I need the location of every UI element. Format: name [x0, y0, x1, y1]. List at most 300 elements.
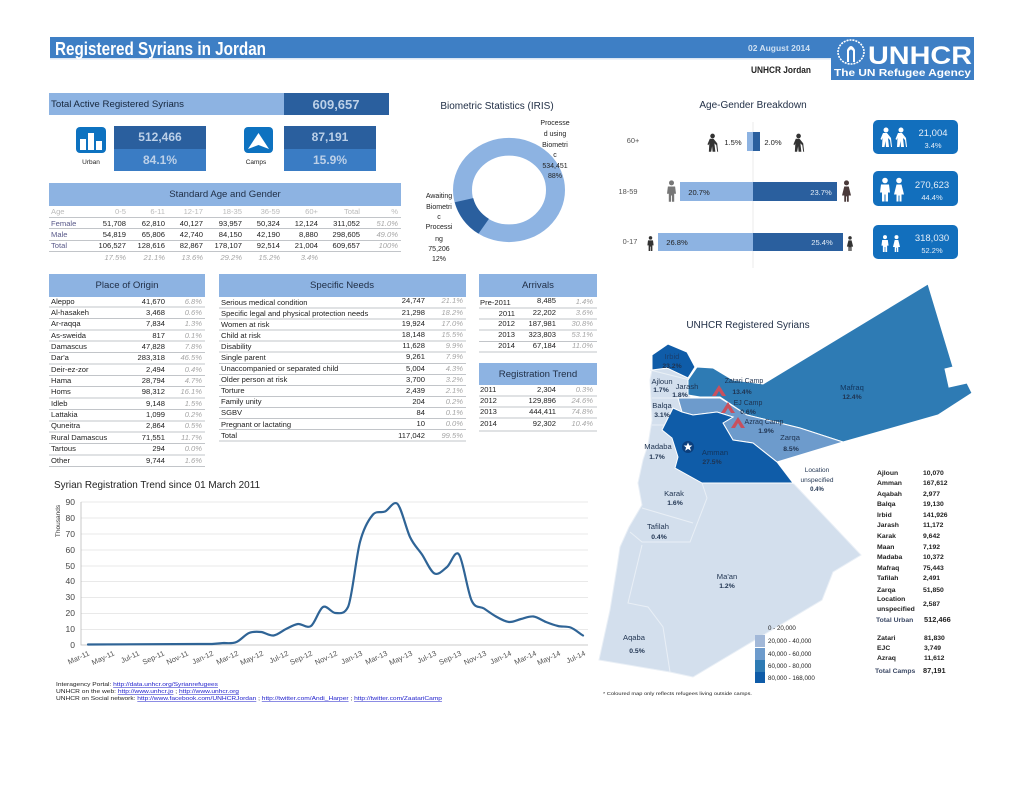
- panel: specific needs: 0.2%: [446, 397, 463, 406]
- map labels: Jarash: [676, 382, 698, 391]
- label: awaiting: ng: [435, 236, 443, 243]
- icon: Azraq camp: [731, 417, 745, 428]
- panel: standard age and gender: Male: [51, 230, 67, 239]
- panel: specific needs: Pregnant or lactating: [221, 420, 291, 429]
- x axis: Mar-13: [364, 649, 389, 667]
- stat box: 60+: 21,004: [918, 128, 948, 139]
- panel: place of origin: 817: [152, 331, 165, 340]
- panel: registration trend table: 2011: [480, 385, 496, 394]
- Amman: [662, 408, 793, 483]
- panel: place of origin: 7,834: [146, 319, 165, 328]
- panel: place of origin: 0.5%: [185, 421, 202, 430]
- panel: place of origin: 1.3%: [185, 319, 202, 328]
- governorate list: Balqa: [877, 501, 896, 508]
- map legend: 40,000 - 60,000: [768, 651, 812, 658]
- panel: standard age and gender: 298,605: [333, 230, 360, 239]
- label: processed: 88%: [548, 173, 562, 180]
- panel: specific needs: 0.1%: [446, 408, 463, 417]
- governorate list: Amman: [877, 480, 902, 487]
- label: processed: c: [553, 152, 557, 159]
- y axis: 10: [66, 624, 75, 634]
- governorate list: Karak: [877, 533, 896, 540]
- map labels: 27.5%: [702, 459, 722, 466]
- y axis: 50: [66, 561, 75, 571]
- panel: place of origin: Homs: [51, 387, 71, 396]
- panel: arrivals: 3.6%: [576, 308, 593, 317]
- x axis: Sep-11: [141, 649, 166, 667]
- panel: registration trend table: 74.8%: [571, 407, 593, 416]
- map labels: 0.4%: [651, 534, 667, 541]
- panel: standard age and gender: 13.6%: [181, 253, 203, 262]
- panel: specific needs: 117,042: [398, 431, 425, 440]
- panel: place of origin: 0.0%: [185, 444, 202, 453]
- stat box: 0-17: 52.2%: [921, 246, 943, 255]
- panel: place of origin: 283,318: [138, 353, 165, 362]
- header bar: [50, 37, 831, 60]
- label: processed: d using: [544, 131, 566, 138]
- footnote: * Coloured map only reflects refugees living outside camps.: [603, 691, 752, 697]
- governorate list: 11,612: [924, 655, 945, 662]
- panel: standard age and gender: 92,514: [257, 241, 280, 250]
- panel: standard age and gender: 178,107: [215, 241, 242, 250]
- icon: EJC camp: [721, 402, 735, 413]
- UNHCR logo: The UN Refugee Agency: [834, 68, 972, 79]
- footer links: UNHCR on Social network: http://www.facebook.com/UNHCRJordan ; http://twitter.com/Andi_Harper ; http://twitter.com/ZaatariCamp: [56, 696, 442, 702]
- stat box: 18-59: 270,623: [915, 180, 949, 191]
- y axis: 40: [66, 576, 75, 586]
- icon: capital star: [682, 441, 694, 453]
- panel: place of origin: Quneitra: [51, 421, 81, 430]
- office name: UNHCR Jordan: [751, 65, 811, 75]
- panel: specific needs: 7.9%: [446, 352, 463, 361]
- map labels: 8.5%: [783, 446, 799, 453]
- panel: arrivals: 2012: [498, 319, 515, 328]
- panel: arrivals: 22,202: [533, 308, 556, 317]
- panel: place of origin: Hama: [51, 376, 72, 385]
- x axis: Jul-12: [268, 649, 290, 665]
- total active registered: [49, 93, 389, 115]
- panel: standard age and gender: 50,324: [257, 219, 280, 228]
- governorate list: Zatari: [877, 635, 896, 642]
- icon: urban: [76, 127, 106, 166]
- label: awaiting: Biometri: [426, 204, 452, 211]
- panel: arrivals: 11.0%: [572, 341, 593, 350]
- map labels: Karak: [664, 489, 684, 498]
- panel: specific needs: 18,148: [402, 330, 425, 339]
- panel: standard age and gender: 21.1%: [142, 253, 165, 262]
- label: awaiting: [426, 193, 453, 263]
- governorate list: Ajloun: [877, 470, 898, 477]
- panel: standard age and gender: 82,867: [180, 241, 203, 250]
- panel: standard age and gender: 18-35: [223, 207, 242, 216]
- panel: standard age and gender: Standard Age and Gender: [169, 189, 282, 200]
- panel: standard age and gender: 0-5: [115, 207, 126, 216]
- y axis: 30: [66, 592, 75, 602]
- governorate list: Total Urban: [876, 617, 913, 624]
- panel: standard age and gender: 36-59: [261, 207, 280, 216]
- panel: registration trend table: 2,304: [537, 385, 556, 394]
- governorate list: 9,642: [923, 533, 940, 540]
- panel: specific needs: Serious medical condition: [221, 298, 308, 307]
- stat box: 18-59: 44.4%: [921, 193, 943, 202]
- Zarqa: [678, 398, 843, 462]
- panel: registration trend table: 0.3%: [576, 385, 593, 394]
- panel: place of origin: 6.8%: [185, 297, 202, 306]
- panel: standard age and gender: 51,708: [103, 219, 126, 228]
- panel: standard age and gender: 51.0%: [376, 219, 398, 228]
- x axis: Nov-12: [313, 649, 339, 667]
- map labels: Azraq Camp: [745, 419, 784, 426]
- panel: specific needs: 10: [417, 419, 425, 428]
- panel: place of origin: Dar'a: [51, 353, 70, 362]
- map labels: Ma'an: [717, 572, 737, 581]
- panel: specific needs: 204: [412, 397, 425, 406]
- panel: specific needs: 15.5%: [441, 330, 463, 339]
- governorate list: 2,587: [923, 601, 940, 608]
- panel: arrivals: 30.8%: [571, 319, 593, 328]
- panel: place of origin: As-sweida: [51, 331, 87, 340]
- panel: standard age and gender: 29.2%: [219, 253, 242, 262]
- map labels: Amman: [702, 448, 728, 457]
- total active registered: Total Active Registered Syrians: [51, 99, 184, 110]
- row 18-59: 18-59: [619, 187, 637, 196]
- panel: place of origin: 0.4%: [185, 365, 202, 374]
- map legend: 20,000 - 40,000: [768, 638, 812, 645]
- map labels: 13.4%: [732, 389, 752, 396]
- icon: camps: [244, 127, 273, 166]
- stat box: 18-59: [873, 171, 958, 206]
- panel: place of origin: 2,864: [146, 421, 165, 430]
- panel: place of origin: Other: [51, 456, 70, 465]
- panel: place of origin: [49, 274, 205, 466]
- panel: place of origin: 0.2%: [185, 410, 202, 419]
- panel: place of origin: Damascus: [51, 342, 87, 351]
- panel: standard age and gender: 15.2%: [258, 253, 280, 262]
- UNHCR logo: UNHCR: [868, 42, 972, 70]
- row 18-59: [619, 180, 851, 202]
- map labels: Zarqa: [780, 433, 801, 442]
- governorate list: Location: [877, 596, 905, 603]
- panel: standard age and gender: 311,052: [333, 219, 360, 228]
- panel: registration trend table: Registration Trend: [499, 369, 577, 380]
- panel: specific needs: Child at risk: [221, 331, 261, 340]
- label: awaiting: Awaiting: [426, 193, 452, 200]
- governorate list: 75,443: [923, 565, 944, 572]
- x axis: Sep-13: [437, 649, 463, 667]
- panel: registration trend table: 92,302: [533, 419, 556, 428]
- panel: place of origin: 294: [152, 444, 165, 453]
- row 60+: 2.0%: [764, 138, 782, 147]
- panel: registration trend table: 24.6%: [570, 396, 593, 405]
- panel: arrivals: Arrivals: [522, 280, 554, 291]
- map legend: 60,000 - 80,000: [768, 663, 812, 670]
- panel: standard age and gender: Age: [51, 207, 65, 216]
- x axis: Nov-11: [165, 649, 190, 667]
- x axis: Mar-11: [66, 649, 91, 666]
- governorate list: 10,372: [923, 554, 944, 561]
- panel: standard age and gender: %: [391, 207, 398, 216]
- x axis: Mar-14: [513, 649, 538, 667]
- panel: standard age and gender: Total: [344, 207, 360, 216]
- icon: urban: Urban: [82, 159, 100, 166]
- panel: place of origin: 11.7%: [181, 433, 202, 442]
- camps stat: 87,191: [312, 130, 349, 144]
- panel: standard age and gender: Female: [51, 219, 76, 228]
- map legend: [755, 622, 815, 683]
- panel: registration trend table: [479, 363, 597, 431]
- map labels: 12.4%: [842, 394, 862, 401]
- total active registered: 609,657: [312, 97, 360, 112]
- governorate list: Aqabah: [877, 491, 902, 498]
- row 0-17: [623, 233, 853, 251]
- map labels: Irbid: [665, 352, 679, 361]
- governorate list: 10,070: [923, 470, 944, 477]
- map labels: Zatari Camp: [725, 378, 763, 385]
- map labels: 1.7%: [649, 454, 665, 461]
- governorate list: 87,191: [923, 666, 946, 675]
- row 60+: 60+: [627, 136, 639, 145]
- panel: specific needs: Family unity: [221, 397, 262, 406]
- stat box: 0-17: 318,030: [915, 233, 949, 244]
- map labels: 1.8%: [672, 392, 688, 399]
- y axis: [55, 497, 75, 650]
- panel: specific needs: 24,747: [402, 296, 425, 305]
- label: awaiting: Processi: [426, 224, 453, 231]
- y axis: 60: [66, 545, 75, 555]
- governorate list: unspecified: [877, 606, 915, 613]
- panel: place of origin: Place of Origin: [96, 280, 158, 291]
- stat box: 60+: [873, 120, 958, 154]
- panel: standard age and gender: 62,810: [142, 219, 165, 228]
- map of Jordan: [599, 284, 972, 677]
- date: 02 August 2014: [748, 44, 811, 53]
- map labels: [623, 352, 864, 655]
- panel: specific needs: 99.5%: [441, 431, 463, 440]
- panel: place of origin: 9,744: [146, 456, 165, 465]
- panel: specific needs: 84: [417, 408, 425, 417]
- row 0-17: 25.4%: [811, 238, 833, 247]
- map labels: 3.1%: [654, 412, 670, 419]
- governorate list: 19,130: [923, 501, 944, 508]
- panel: specific needs: 21.1%: [440, 296, 463, 305]
- panel: specific needs: Older person at risk: [221, 375, 287, 384]
- panel: standard age and gender: 106,527: [99, 241, 126, 250]
- governorate list: Maan: [877, 544, 894, 551]
- panel: place of origin: 1,099: [146, 410, 165, 419]
- panel: registration trend table: 129,896: [529, 396, 556, 405]
- panel: specific needs: 2.1%: [445, 386, 463, 395]
- panel: registration trend table: 2013: [480, 407, 497, 416]
- map labels: unspecified: [801, 477, 834, 484]
- governorate list: 512,466: [924, 615, 951, 624]
- panel: specific needs: Women at risk: [221, 320, 270, 329]
- panel: place of origin: 7.8%: [185, 342, 202, 351]
- urban stat: 84.1%: [143, 153, 177, 167]
- governorate list: Jarash: [877, 522, 899, 529]
- x axis: Jul-14: [565, 649, 587, 665]
- panel: standard age and gender: Total: [51, 241, 67, 250]
- panel: place of origin: 41,670: [142, 297, 165, 306]
- line chart: [55, 497, 588, 667]
- map legend: 80,000 - 168,000: [768, 675, 815, 682]
- panel: place of origin: Ar-raqqa: [51, 319, 81, 328]
- heading: biometric: Biometric Statistics (IRIS): [440, 101, 554, 112]
- panel: place of origin: 4.7%: [185, 376, 202, 385]
- map labels: EJ Camp: [734, 400, 762, 407]
- governorate list: Zarqa: [877, 587, 896, 594]
- map labels: 1.6%: [667, 500, 683, 507]
- panel: specific needs: Specific Needs: [310, 280, 374, 291]
- panel: standard age and gender: 93,957: [219, 219, 242, 228]
- row 18-59: 23.7%: [810, 188, 832, 197]
- panel: standard age and gender: 8,880: [299, 230, 318, 239]
- map labels: 1.9%: [758, 428, 774, 435]
- label: processed: [540, 120, 570, 180]
- row 60+: [627, 132, 804, 152]
- y axis: 20: [66, 608, 75, 618]
- y axis: 0: [70, 640, 75, 650]
- stat box: 60+: 3.4%: [924, 141, 942, 150]
- panel: standard age and gender: 49.0%: [376, 230, 398, 239]
- panel: place of origin: Tartous: [51, 444, 76, 453]
- label: processed: Processe: [540, 120, 570, 127]
- panel: standard age and gender: 40,127: [180, 219, 203, 228]
- map labels: 0.6%: [740, 409, 756, 416]
- panel: specific needs: 2,439: [406, 386, 425, 395]
- icon: Zatari camp: [712, 385, 726, 396]
- y axis: Thousands: [55, 504, 62, 537]
- map labels: 1.2%: [719, 583, 735, 590]
- governorate list: Irbid: [877, 512, 892, 519]
- panel: standard age and gender: 42,740: [180, 230, 203, 239]
- governorate list: Madaba: [877, 554, 903, 561]
- x axis: May-14: [536, 649, 562, 667]
- x axis: Jan-14: [489, 649, 513, 666]
- label: awaiting: 75,206: [428, 246, 450, 253]
- panel: place of origin: 0.6%: [185, 308, 202, 317]
- panel: arrivals: Pre-2011: [480, 298, 511, 307]
- panel: standard age and gender: 42,190: [257, 230, 280, 239]
- map labels: Aqaba: [623, 633, 646, 642]
- panel: arrivals: 2013: [498, 330, 515, 339]
- row 18-59: 20.7%: [688, 188, 710, 197]
- x axis: Jul-13: [416, 649, 438, 665]
- panel: specific needs: Torture: [221, 386, 245, 395]
- panel: place of origin: Al-hasakeh: [51, 308, 89, 317]
- y axis: 70: [66, 529, 75, 539]
- trend line: [88, 503, 583, 644]
- panel: arrivals: 1.4%: [576, 297, 593, 306]
- panel: specific needs: Specific legal and physical protection needs: [221, 309, 369, 318]
- panel: place of origin: 0.1%: [185, 331, 202, 340]
- donut chart: [426, 120, 570, 263]
- panel: registration trend table: 444,411: [529, 407, 556, 416]
- governorate list: 7,192: [923, 544, 940, 551]
- map labels: Balqa: [652, 401, 672, 410]
- governorate list: 3,749: [924, 645, 941, 652]
- panel: place of origin: 1.5%: [185, 399, 202, 408]
- x axis: Nov-13: [462, 649, 488, 667]
- panel: arrivals: 2011: [499, 309, 515, 318]
- panel: place of origin: 16.1%: [180, 387, 202, 396]
- y axis: 90: [66, 497, 75, 507]
- panel: specific needs: 4.3%: [446, 364, 463, 373]
- title: Registered Syrians in Jordan: [55, 39, 266, 59]
- panel: specific needs: 9,261: [406, 352, 425, 361]
- label: awaiting: 12%: [432, 256, 446, 263]
- governorate list: 141,926: [923, 512, 948, 519]
- heading: map: UNHCR Registered Syrians: [686, 320, 810, 331]
- panel: place of origin: 3,468: [146, 308, 165, 317]
- age-gender bars: [619, 122, 853, 268]
- panel: standard age and gender: 65,806: [142, 230, 165, 239]
- map labels: 1.7%: [653, 387, 669, 394]
- map legend: 0 - 20,000: [768, 625, 796, 632]
- south and west governorates: [599, 368, 861, 677]
- panel: place of origin: 28,794: [142, 376, 165, 385]
- map labels: Mafraq: [840, 383, 864, 392]
- panel: place of origin: 9,148: [146, 399, 165, 408]
- panel: standard age and gender: 6-11: [150, 207, 165, 216]
- footer links: UNHCR on the web: http://www.unhcr.jo ; http://www.unhcr.org: [56, 689, 239, 695]
- map labels: 0.5%: [629, 648, 645, 655]
- Mafraq: [688, 284, 972, 442]
- governorate list: Mafraq: [877, 565, 899, 572]
- label: awaiting: c: [437, 214, 441, 221]
- panel: place of origin: Aleppo: [51, 297, 75, 306]
- governorate list: Azraq: [877, 655, 896, 662]
- urban stat: [114, 126, 206, 171]
- panel: standard age and gender: 128,616: [138, 241, 165, 250]
- panel: specific needs: 5,004: [406, 364, 425, 373]
- y axis: 80: [66, 513, 75, 523]
- governorate list: 11,172: [923, 522, 944, 529]
- panel: specific needs: 18.2%: [441, 308, 463, 317]
- panel: registration trend table: 2014: [480, 419, 497, 428]
- x axis: May-11: [90, 649, 116, 667]
- camps stat: 15.9%: [313, 153, 347, 167]
- panel: arrivals: 53.1%: [571, 330, 593, 339]
- panel: arrivals: 8,485: [537, 296, 556, 305]
- governorate list: 2,491: [923, 575, 940, 582]
- panel: arrivals: 67,184: [533, 341, 556, 350]
- governorate list: 81,830: [924, 635, 945, 642]
- panel: specific needs: 3.2%: [446, 375, 463, 384]
- panel: specific needs: Single parent: [221, 353, 267, 362]
- panel: place of origin: Lattakia: [51, 410, 78, 419]
- map labels: Location: [805, 467, 830, 474]
- panel: specific needs: SGBV: [221, 408, 243, 417]
- panel: standard age and gender: 84,150: [219, 230, 242, 239]
- UNHCR logo: [831, 37, 974, 80]
- map labels: Madaba: [644, 442, 672, 451]
- map labels: 0.4%: [810, 487, 824, 493]
- x axis: May-12: [239, 649, 265, 667]
- panel: specific needs: [219, 274, 466, 441]
- panel: specific needs: 11,628: [402, 341, 425, 350]
- panel: standard age and gender: 12,124: [295, 219, 318, 228]
- chart heading: Syrian Registration Trend since 01 March 2011: [54, 479, 260, 491]
- x axis: Mar-12: [215, 649, 240, 667]
- label: processed: 534,451: [542, 163, 568, 170]
- x axis: Jul-11: [119, 649, 141, 665]
- panel: specific needs: Total: [221, 431, 237, 440]
- panel: arrivals: 187,981: [529, 319, 556, 328]
- panel: specific needs: 21,298: [402, 308, 425, 317]
- panel: standard age and gender: 17.5%: [104, 253, 126, 262]
- governorate list: [875, 470, 951, 675]
- governorate list: EJC: [877, 645, 890, 652]
